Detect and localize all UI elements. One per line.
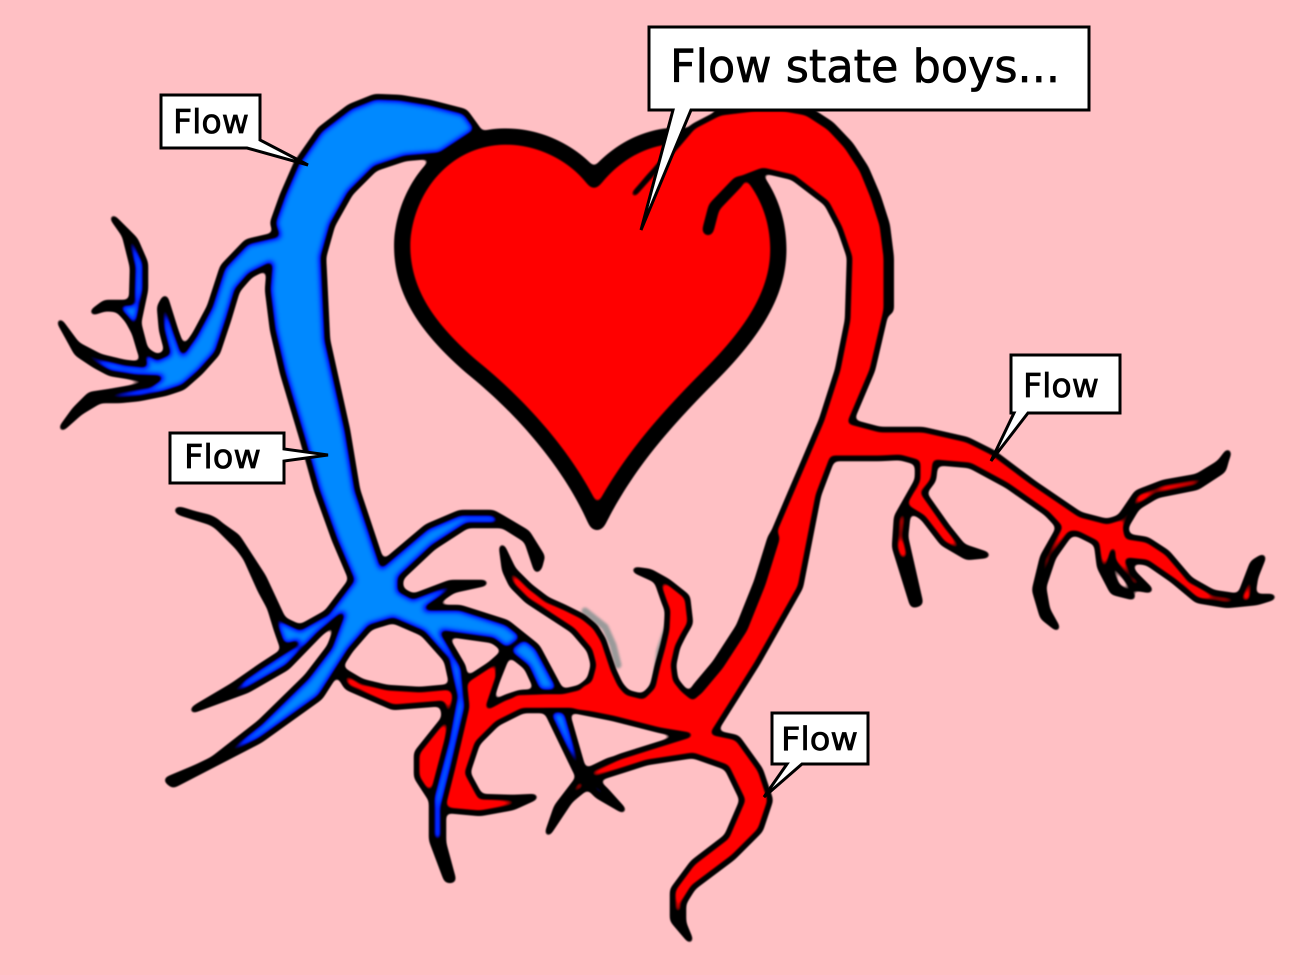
artery thick edges: [634, 107, 889, 690]
callout: Flow mid left: Flow: [184, 437, 261, 476]
callout: Flow upper left: [161, 95, 308, 165]
callout: Flow lower right: [764, 713, 868, 797]
callout: Flow mid left: [170, 433, 328, 483]
callout: Flow state boys: Flow state boys...: [670, 40, 1060, 93]
tapered black branch ends: [172, 454, 1228, 937]
red artery and capillary network: [333, 109, 1273, 940]
blue vein with branches: [60, 97, 623, 880]
callout: Flow lower right: Flow: [781, 720, 858, 758]
callout: Flow state boys: [641, 27, 1089, 230]
callout: Flow right: [991, 355, 1120, 461]
shading: grey marks on capillaries: [585, 590, 670, 702]
callout: Flow right: Flow: [1023, 366, 1099, 405]
callout: Flow upper left: Flow: [173, 102, 249, 141]
red crossing over blue vein: [497, 638, 610, 833]
icon: heart: [402, 136, 778, 522]
